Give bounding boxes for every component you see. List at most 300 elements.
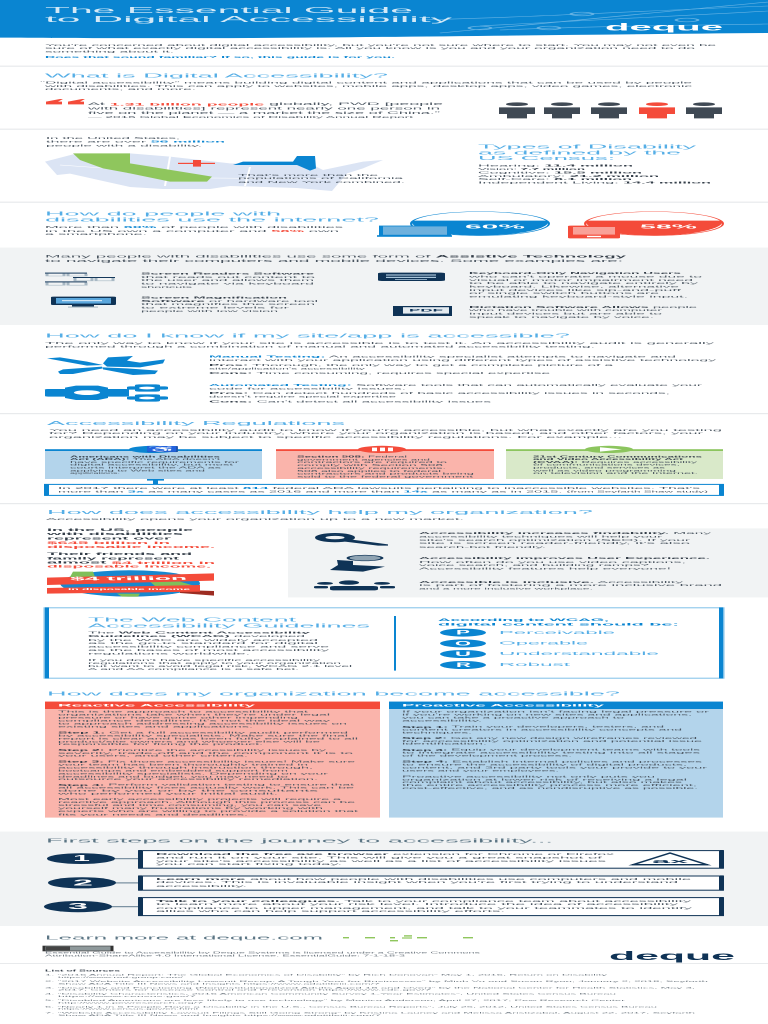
text: dictation: input devices but are able to [469, 312, 662, 315]
list of sources: 6. “Nearly 1 in 5 People Have a Disability in the U.S., Census Bureau Reports”, July 25, 2012, United States Census Bureau [45, 1005, 657, 1008]
disability types list: Self-Care: 8.1 million [478, 178, 632, 181]
Operable: Operable [499, 641, 588, 646]
icon: monitor [51, 297, 116, 308]
panel: CVAA: on television and the Internet. [533, 472, 698, 475]
text: manual testing: Pros: Thorough, the only way to get a complete picture of a [209, 364, 613, 367]
disability types list: Ambulatory: 21.2 million [478, 174, 659, 178]
panel: proactive accessibility: If your organization isn't facing legal pressure or [402, 710, 710, 713]
panel: reactive accessibility: responsible for fixing the product. [58, 743, 263, 746]
panel: reactive accessibility: severity, trade-off and the component it is to [58, 752, 353, 755]
text: automated testing [209, 384, 703, 403]
title: The Essential Guide [45, 6, 413, 15]
text: screen magnification: Software or hardware tool [141, 299, 318, 303]
chart: 60% computer: 60% [465, 224, 525, 230]
panel: reactive accessibility: deadlines and budget, you may need to [58, 775, 288, 778]
illustration: globe and ribbon: in disposable income [68, 588, 190, 591]
intro: You need an accessibility audit to know if you're accessible, but what exactly are you testing [49, 428, 722, 432]
text: screen magnification: to extreme levels for [141, 306, 290, 309]
text: keyboard-only: emulating keyboard-style input. [469, 295, 688, 298]
step 2: accessibility. [156, 884, 247, 888]
intro text: something about it. [45, 50, 174, 53]
panel: reactive accessibility: Step 2: Prioritize the accessibility issues by [58, 749, 326, 752]
disability types list: Cognitive: 15.5 million [478, 171, 642, 174]
panel: reactive accessibility: by accessibility specialists. Make sure the final [58, 734, 348, 737]
panel: proactive accessibility: Step 4: Establish internal policies and processes [402, 760, 702, 763]
list of sources: 4. “Disability Characteristics, 2016 American Community Survey 1-Year Estimates”, United States Census Bureau [45, 993, 616, 995]
connector [147, 479, 164, 484]
panel: CVAA: of communications devices, [533, 463, 680, 467]
market figures text: almost $4 trillion in [47, 560, 215, 564]
market figures text: Their friends and [47, 552, 192, 556]
panel: proactive accessibility: cost-effective, and as nondisruptive as possible. [402, 787, 698, 790]
list of sources: 2. “2017 Website Accessibility Lawsuit Recap: A Tough Year for Businesses” by Minh Vu and Susan Ryan, January 2, 2018, Seyfarth [45, 980, 708, 983]
heading: What is Digital Accessibility? [45, 73, 388, 79]
panel: reactive accessibility: organizations take when they're under legal [58, 713, 330, 716]
text: user experience: voice search, and building ramps? [419, 564, 649, 567]
icon: axe logo [632, 853, 708, 865]
list of sources: https://www.census.gov/en.html [58, 1008, 198, 1010]
list of sources: 5. “Disabled Americans are less likely to use technology” by Monica Anderson, April 27, 2017, Pew Research Center [45, 999, 626, 1002]
text: screen readers: the user and allows them [141, 279, 314, 282]
step 1: you can start fixing today. [156, 863, 342, 866]
map of the USA [45, 153, 383, 191]
panel: ADA: digital accessibility, but most [70, 463, 233, 467]
heading: How do people with [45, 211, 281, 217]
disability types list [478, 164, 711, 184]
step 1: and run it on your site. This will give you a great snapshot of [156, 856, 604, 859]
section: how do I know if accessible [45, 333, 717, 403]
step 2: 2 [73, 878, 93, 887]
panel: ADA: Americans with Disabilities [70, 455, 220, 458]
illustration: globe and ribbon [47, 570, 214, 597]
panel: proactive accessibility: for accessibility optimization and potential issue [402, 740, 702, 743]
icon: laptop [377, 226, 452, 237]
step 1 [47, 850, 723, 869]
header banner [0, 0, 768, 38]
badge: play [585, 446, 633, 453]
types of disability heading: as defined by the [478, 150, 681, 156]
quote text: five on the planet — a market the size of China.” [88, 111, 440, 115]
POUR list [440, 629, 659, 669]
creative commons licence [44, 946, 480, 957]
panel: reactive accessibility: Most early accessibility projects will require a [58, 798, 342, 801]
text: automated testing: code for accessibility issues. [209, 387, 406, 390]
step 3: 3 [68, 902, 88, 911]
WCAG description: as the go-to standard for digital [88, 642, 318, 645]
WCAG description: regulations worldwide. [88, 652, 250, 655]
badge: wheelchair: ♿ [145, 446, 180, 452]
market figures text: with disabilities [46, 532, 183, 536]
definition text [40, 81, 693, 91]
chart: 60% computer [377, 212, 549, 237]
creative commons licence: Essential Guide to Accessibility by Deque Systems is licensed under a Creative Commons [45, 951, 480, 954]
intro text: Does that sound familiar? If so, this guide is for you. [45, 56, 395, 59]
icon: crossed wrench and screwdriver [47, 356, 165, 375]
intro text [45, 43, 716, 59]
text: manual testing: Cons: Time consuming, requires special expertise [209, 372, 550, 375]
panel: CVAA: 21st Century Communications [533, 455, 702, 458]
intro: to navigate their computers and mobile devices. Some examples are: [45, 259, 623, 263]
panel: reactive accessibility: experts who are willing to provide a solution that [58, 810, 358, 813]
callout: lawsuits [45, 484, 723, 496]
text: user experience: How often do you use video captions, [419, 560, 686, 564]
disability types list: Independent Living: 14.4 million [478, 181, 711, 184]
badge: columns [358, 446, 406, 453]
chart: 58% smartphone: 58% [640, 224, 697, 230]
panel: Section 508: government agencies and [297, 458, 430, 461]
intro: for? Depending on your industry, where your organization is based, and other factors, your [49, 432, 704, 435]
text: screen magnification: that magnifies the screen [141, 303, 315, 306]
text: automated testing: doesn't require special expertise [209, 395, 396, 398]
US statistic text: In the United States, [46, 137, 180, 140]
text: manual testing: site/application's accessibility [209, 367, 366, 370]
title [45, 6, 453, 24]
list of sources: 3. “Disability and Functioning (Noninstitutionalized Adults Aged 18 and Over)” by the National Center for Health Statistics, May 3, [45, 986, 695, 989]
market figures text: family represent [47, 556, 180, 560]
US statistic text: there are over 56 million [46, 140, 225, 143]
intro: The only way to know if your site is accessible is to test it. An accessibility audit is generally [45, 342, 715, 345]
WCAG description: Guidelines (WCAG) developed [88, 635, 305, 638]
Understandable [440, 650, 659, 658]
panel: proactive accessibility: the entire accessibility process more efficient, [402, 784, 697, 787]
text: manual testing [209, 355, 717, 375]
text: screen readers: that reads out content to [141, 275, 315, 279]
POUR heading: According to WCAG, [438, 618, 609, 622]
panel: reactive accessibility: pressure or have some other impending [58, 716, 298, 719]
subheading: Accessibility opens your organization up to a new market. [46, 517, 464, 521]
callout: lawsuits: In 2017 there were at least 814 federal ADA lawsuits pertaining to inaccessible websites. That's [58, 487, 701, 490]
list of sources: https://www.census.gov/7 [58, 995, 196, 998]
map caption [238, 173, 405, 184]
WCAG description: but want to avoid legal risk, WCAG 2.1 level [88, 665, 352, 668]
title: to Digital Accessibility [45, 15, 453, 24]
text: keyboard-only: to be able to navigate entirely by [469, 282, 699, 285]
types of disability heading: US Census: [478, 155, 615, 161]
Perceivable [440, 629, 615, 637]
panel: proactive accessibility: identification. [402, 742, 487, 745]
panel: ADA: applications. [70, 472, 120, 475]
logo: deque: deque [605, 21, 723, 32]
list of sources: 1. “2016 Annual Report: The Global Economics of Disability” by Rich Donovan” May 1, 2016, Return on Disability [45, 974, 607, 976]
market figures text [46, 528, 215, 568]
panel: reactive accessibility: reactive approach. Although this process can be [58, 801, 355, 804]
panel: Section 508: comply with Section 508 [297, 464, 443, 467]
heading: Accessibility Regulations [47, 420, 345, 426]
step 2 [48, 875, 723, 891]
map caption: and New York combined. [238, 181, 405, 184]
list of sources: 2017, Centers for Disease Control and Prevention https://www.cdc.gov/7 [58, 989, 431, 991]
intro [45, 342, 715, 348]
panel: proactive accessibility: organization at lower risk of receiving a legal [402, 778, 687, 781]
intro: organization may be subject to specific accessibility regulations. For example... [49, 435, 622, 439]
Robust: Robust [499, 663, 571, 667]
panel: Section 508: contractors are required to [297, 461, 447, 464]
quote text: with disabilities] represent nearly one person in [87, 106, 440, 110]
Perceivable: Perceivable [499, 630, 615, 635]
panel: reactive accessibility: all accessibility fixes actually work. This can be [58, 786, 354, 790]
text: user experience: Accessibility improves User Experience. [419, 557, 710, 560]
decorative green dots [343, 935, 473, 941]
panel: reactive accessibility: yourself many frustrations by working with [58, 807, 323, 810]
text: inclusive: and a more inclusive workplace. [419, 587, 593, 590]
quote text [87, 102, 443, 119]
panel: proactive accessibility: accessibility. [402, 719, 482, 723]
panel: Section 508 [276, 446, 494, 479]
text: findability: site is screen reader-friendly, it's also [419, 542, 690, 545]
step 3 [44, 897, 723, 916]
panel: reactive accessibility: accessibility specialists. Depending on your [58, 772, 329, 775]
WCAG description: as the bases of most accessibility [88, 648, 330, 652]
icon: PDF document: PDF [409, 308, 444, 312]
step 3: compliance to upper management, and talk to your teammates to identify [156, 906, 693, 910]
section: what is digital accessibility [40, 73, 722, 119]
panel: proactive accessibility: Proactive accessibility not only puts you [402, 775, 655, 778]
body text: More than 60% of people with disabilities [45, 226, 344, 229]
panel: proactive accessibility: Proactive Accessibility [402, 703, 604, 708]
text: screen readers: Screen Readers Software [141, 272, 314, 275]
text: findability: accessibility techniques will help your [419, 535, 663, 538]
panel: reactive accessibility: your team has been thoroughly trained in [58, 763, 308, 766]
section: how does accessibility help [46, 509, 768, 597]
US statistic text: people with a disability. [46, 144, 202, 147]
panel: reactive accessibility: bootcamps and embedded support from [58, 769, 288, 772]
panel: Section 508: 508 also applies to federal [297, 470, 441, 473]
list of sources [45, 969, 708, 1017]
panel: proactive accessibility: users and your employees. [402, 769, 559, 772]
body text: a smartphone. [45, 233, 147, 236]
panel: CVAA: well as video programming [532, 469, 676, 472]
text: keyboard-only: Keyboard-Only Navigation Users [469, 272, 681, 275]
chart: 58% smartphone [568, 212, 723, 238]
text: findability: site's search optimization (SEO). If your [419, 538, 691, 542]
WCAG description: regulations that apply to your organization [88, 662, 341, 665]
panel: reactive accessibility: Reactive Accessibility [58, 703, 255, 708]
heading: The Web Content [88, 617, 297, 623]
body text [45, 226, 344, 236]
panel: reactive accessibility: compliance deadline. It's not the ideal way [58, 719, 330, 722]
text: dictation: Dictation Software Allows people [469, 305, 697, 309]
intro [45, 254, 626, 263]
plus marker [178, 160, 215, 167]
panel: proactive accessibility: you can take a proactive approach to [402, 716, 624, 719]
panel: reactive accessibility [45, 702, 380, 818]
panel: reactive accessibility: accessibility through instruction through, [58, 766, 313, 769]
badge: wheelchair [129, 446, 180, 453]
panel: proactive accessibility: complaint about accessibility, but also makes [402, 781, 682, 784]
panel: reactive accessibility: Step 4: Perform validation testing to ensure that [58, 783, 354, 787]
panel: proactive accessibility [389, 702, 723, 818]
heading [45, 211, 379, 223]
icon: PDF document [393, 306, 452, 316]
list of sources: Shaw ADA Title III News and Insights https://www.adatitleiii.com/7 [58, 1014, 381, 1017]
text: screen magnification: Screen Magnification [141, 296, 287, 299]
panel: Section 508: Section 508: Federal [297, 455, 407, 458]
panel: CVAA: and Video Accessibility Act [533, 458, 684, 461]
text: keyboard-only: or single switch buttons are [469, 292, 659, 295]
heading: Accessibility Guidelines [88, 623, 370, 629]
POUR heading: digital content should be: [438, 622, 679, 626]
text: screen magnification: people with low vision [141, 309, 278, 313]
text: inclusive: Accessible is inclusive. Accessibility [419, 580, 684, 584]
panel: reactive accessibility: existing sites and applications. [58, 725, 253, 728]
list of sources: Shaw ADA Title III News and Insights https://www.adatitleiii.com/7 [58, 982, 380, 985]
map caption: populations of California [238, 177, 403, 180]
list of sources: https://www.rod-group.com/ [58, 976, 184, 979]
panel: reactive accessibility: stressful and time consuming, you can save [58, 804, 321, 807]
list of sources: 7. “Website Accessibility Lawsuit Filings Still Going Strong” by Kristina Launey and Melissa Aristizabal, August 22, 2017, Seyfarth [45, 1012, 695, 1014]
panel: reactive accessibility: to approach addressing accessibility issues on [58, 722, 347, 725]
panel: benefits [288, 528, 768, 597]
definition text: “Digital accessibility” means building digital content and applications that can be used by people [40, 81, 692, 84]
panel: WCAG guidelines [45, 607, 723, 678]
panel: CVAA [506, 446, 723, 479]
heading: First steps on the journey to accessibility... [46, 838, 553, 844]
panel: assistive technology [0, 248, 768, 325]
disability types list: Hearing: 11.4 million [478, 164, 633, 167]
panel: reactive accessibility: Step 1: Get a full accessibility audit performed [58, 731, 348, 734]
heading [88, 617, 370, 629]
panel: CVAA: (CVAA): Requires accessibility [533, 461, 697, 464]
WCAG description: The Web Content Accessibility [88, 631, 310, 634]
text: automated testing: Pros: Can detect hundreds of basic accessibility issues in seconds, [209, 392, 670, 395]
text: keyboard-only: who can't operate a mouse due to [468, 275, 702, 278]
icon: quotation marks [46, 99, 85, 104]
Operable: O [455, 640, 471, 647]
icon: glasses [45, 273, 115, 285]
step 3: Talk to your colleagues. Talk to your compliance team about accessibility [156, 899, 692, 903]
text: findability [419, 532, 712, 549]
panel: proactive accessibility: Step 1: Train your developers, testers, and [402, 725, 664, 729]
icon: axe logo: ax [652, 858, 689, 864]
panel: proactive accessibility: to integrate accessibility testing into all stages [402, 751, 700, 755]
step 3: allies who can help support accessibility efforts. [156, 910, 505, 913]
step 1: Download the free axe browser extension for Chrome or Firefox [156, 853, 615, 856]
panel: reactive accessibility: report is clear and has been fully explained to all [58, 737, 358, 740]
text: dictation: speak to navigate by voice. [469, 315, 654, 319]
illustration: globe and ribbon: $4 trillion [70, 575, 187, 582]
California [73, 153, 212, 182]
market figures text: disposable income. [47, 545, 215, 549]
panel: reactive accessibility: fits your needs and deadlines. [58, 813, 248, 817]
text: findability: Accessibility increases findability. Many [419, 532, 712, 535]
panel: ADA: have specific requirements for [70, 461, 240, 464]
panel: ADA: applying to Web sites and [70, 469, 205, 472]
heading: disabilities use the internet? [45, 217, 379, 223]
section: accessibility regulations [45, 420, 723, 496]
step 1: your site's accessibility as well as a list of accessibility issues [156, 859, 607, 863]
body text: in the US own a computer and 58% own [45, 229, 339, 233]
quote text: — 2016 Global Economics of Disability Annual Report [88, 116, 413, 119]
types of disability heading [478, 144, 697, 161]
POUR heading [438, 618, 679, 626]
step 3: to learn more about your risk level. Introduce the idea of accessibility [156, 903, 679, 906]
panel: proactive accessibility: content creators in accessibility concepts and [402, 728, 682, 732]
Understandable: U [455, 651, 471, 657]
WCAG description: by the W3C are widely accepted [88, 638, 318, 642]
footer: learn more: Learn more at deque.com [45, 935, 323, 941]
text: keyboard-only: visual or motor impairment need [469, 278, 693, 282]
heading: how does my organization become accessible: How does my organization become accessible? [47, 691, 620, 697]
market figures text: disposable income. [47, 564, 211, 568]
Robust: R [456, 662, 471, 668]
map caption: That's more than the [238, 173, 378, 177]
panel: ADA: courts interpret the ADA as [70, 466, 221, 469]
text: keyboard-only: keyboard. Likewise, alternative [469, 285, 679, 288]
panel: reactive accessibility: done by you or by the consultants [58, 789, 318, 793]
list of sources: List of Sources [45, 969, 120, 972]
WCAG description: If you don't have specific accessibility [88, 659, 320, 662]
panel: reactive accessibility: Step 3: Fix those accessibility issues! Make sure [58, 760, 355, 763]
panel: ADA: Act (ADA): The ADA doesn't [70, 458, 220, 461]
section: US statistics [45, 137, 711, 191]
panel: Section 508: accessibility requirements. [297, 467, 446, 470]
heading: How does accessibility help my organization? [47, 509, 593, 515]
text: keyboard-only: input devices like sip-and-puff [469, 288, 682, 292]
intro text: sure of what exactly digital accessibility is. All you know is you and your organization need to do [45, 47, 695, 50]
text: inclusive [419, 580, 722, 590]
panel: CVAA: products, and services as [533, 466, 665, 469]
market figures text: In the US, people [47, 528, 193, 532]
panel: reactive accessibility: This is the approach to accessibility that [58, 710, 308, 713]
panel: ADA [45, 446, 262, 479]
badge: CC [44, 946, 112, 951]
footer: learn more [45, 935, 473, 941]
icon: keyboard [378, 273, 445, 281]
icon: smartphone [568, 226, 620, 238]
US statistic text [46, 137, 225, 147]
text: keyboard-only [468, 272, 702, 298]
definition text: with disabilities. This can apply to websites, mobile apps, desktop apps, video games, electronic [44, 84, 693, 88]
text: automated testing: Cons: Can't detect all accessibility issues [209, 400, 492, 403]
step 2: Learn more about how people with disabilities use computers and mobile [156, 877, 691, 881]
text: inclusive: is part of fostering a more inclusive brand [419, 584, 722, 587]
panel: reactive accessibility: outsource your accessibility remediation. [58, 778, 318, 781]
quote text: At 1.31 billion people globally, PWD [people [88, 102, 443, 106]
Understandable: Understandable [499, 652, 659, 656]
icon: gears [45, 384, 168, 402]
text: dictation: who have trouble with computer [468, 309, 662, 312]
icon: group of people [314, 580, 395, 590]
icon: five people, one highlighted [499, 102, 722, 118]
section: how people use the internet [45, 211, 723, 238]
panel: proactive accessibility: Step 2: Get any new design wireframes reviewed [402, 737, 697, 740]
text: user experience [419, 557, 710, 570]
intro text: You're concerned about digital accessibility, but you're not sure where to start. You may not even be [45, 43, 716, 47]
WCAG description: accessibility compliance and serve [88, 645, 329, 648]
text: manual testing: interact with your application using different types of assistive technology [209, 358, 717, 362]
intro: performed through a combination of manual and automated accessibility testing. [45, 345, 595, 348]
panel: proactive accessibility: content, and 3rd party tools your provide to your [402, 766, 708, 769]
step 1: 1 [73, 854, 90, 863]
text: user experience: Accessibility features help everyone! [419, 567, 671, 570]
New York [233, 156, 316, 171]
Operable [440, 639, 588, 647]
icon: user with headset [330, 555, 385, 572]
intro [49, 428, 722, 439]
Robust [440, 661, 571, 669]
text: screen readers: shortcuts [141, 285, 193, 289]
intro: Many people with disabilities use some form of Assistive Technology [45, 254, 626, 259]
creative commons licence: Attribution-ShareAlike 4.0 International License. EssentialGuide: 7-1-18-3 [45, 954, 405, 957]
panel: proactive accessibility: techniques. [402, 731, 472, 735]
WCAG description [88, 631, 352, 671]
icon: magnifying glass [318, 534, 388, 546]
list of sources: http://www.pewresearch.org/7 [58, 1001, 203, 1004]
panel: proactive accessibility: Step 3: Equip your development teams with tools [402, 748, 700, 752]
disability types list: Vision: 7.7 million [478, 168, 585, 171]
text: findability: search-bot friendly. [419, 545, 546, 549]
callout: lawsuits: more than 3x as many cases as 2016 and more than 14x as many as in 2015. (from Seyfarth Shaw study) [58, 490, 708, 493]
